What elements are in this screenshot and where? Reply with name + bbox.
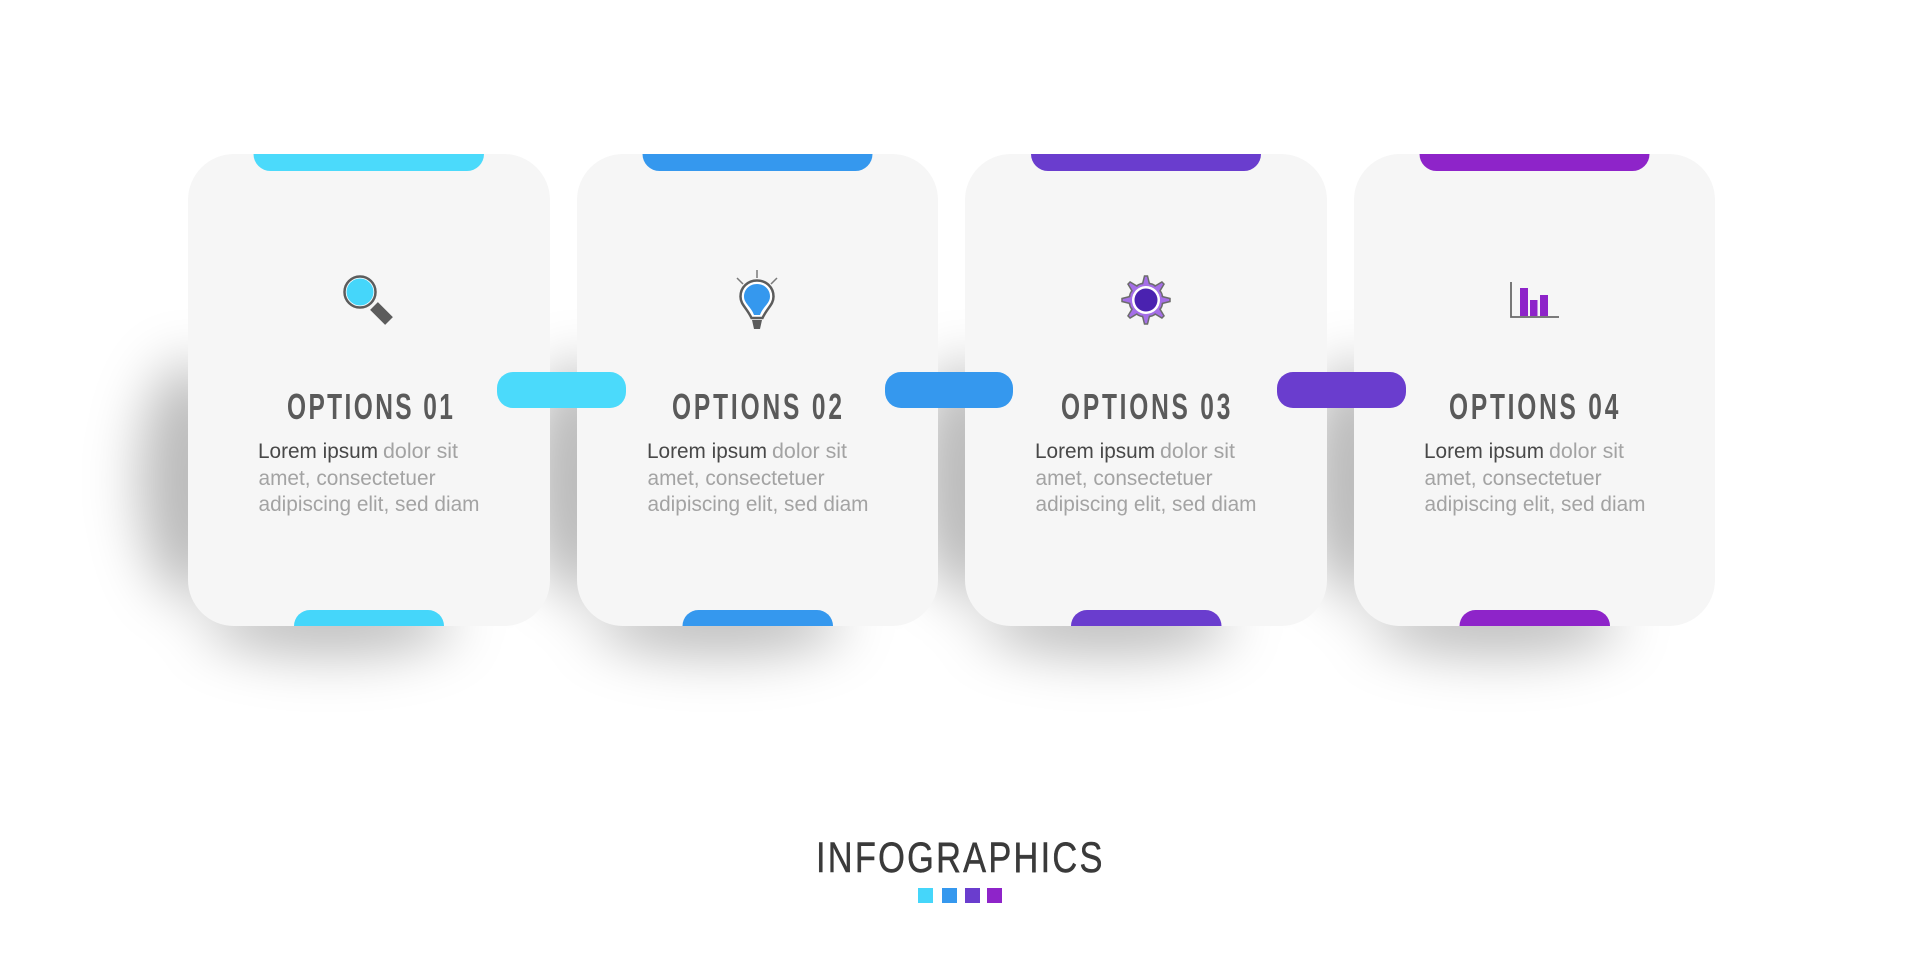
- top tab 04: [1420, 154, 1650, 171]
- colour legend squares: [918, 888, 1002, 903]
- panel: option 01: [188, 154, 550, 626]
- top tab 01: [254, 154, 484, 171]
- top tab 03: [1031, 154, 1261, 171]
- card background 01: [188, 154, 550, 626]
- bottom tab 01: [294, 610, 444, 626]
- text block 04: adipiscing elit, sed diam: [1424, 493, 1646, 516]
- heading: options 01: OPTIONS 01: [287, 386, 453, 427]
- bottom tab 02: [682, 610, 833, 626]
- heading: options 03: OPTIONS 03: [1061, 386, 1230, 427]
- card background 04: [1354, 154, 1715, 626]
- text block 01: dolor sit: [383, 440, 458, 463]
- icon: light bulb: [737, 270, 777, 329]
- text block 01: adipiscing elit, sed diam: [258, 493, 480, 516]
- card shadows: [140, 362, 1621, 654]
- text block 04: amet, consectetuer: [1424, 467, 1602, 490]
- panel: option 04: [1354, 154, 1715, 626]
- text block 01: amet, consectetuer: [258, 467, 436, 490]
- text block 02: [647, 440, 868, 516]
- heading: options 02: OPTIONS 02: [672, 386, 842, 427]
- title: INFOGRAPHICS: [816, 834, 1102, 882]
- panel: option 03: [965, 154, 1327, 626]
- icon: bar chart: [1511, 282, 1559, 317]
- top tab 02: [642, 154, 872, 171]
- card background 02: [577, 154, 938, 626]
- text block 03: adipiscing elit, sed diam: [1036, 493, 1256, 516]
- text block 02: Lorem ipsum: [647, 440, 767, 463]
- heading: options 04: OPTIONS 04: [1449, 386, 1618, 427]
- card background 03: [965, 154, 1327, 626]
- text block 03: [1035, 440, 1256, 516]
- text block 03: dolor sit: [1160, 440, 1235, 463]
- text block 04: [1424, 440, 1646, 516]
- text block 02: amet, consectetuer: [648, 467, 825, 490]
- text block 03: amet, consectetuer: [1036, 467, 1213, 490]
- bottom tab 04: [1460, 610, 1610, 626]
- text block 02: adipiscing elit, sed diam: [648, 493, 868, 516]
- bottom tab 03: [1071, 610, 1222, 626]
- text block 02: dolor sit: [772, 440, 847, 463]
- icon: gear: [1122, 276, 1170, 324]
- text block 01: [258, 440, 480, 516]
- text block 04: dolor sit: [1549, 440, 1624, 463]
- connector 03 to 04: [1277, 372, 1406, 408]
- icon: magnifying glass: [344, 276, 389, 321]
- connector 01 to 02: [497, 372, 626, 408]
- panel: option 02: [577, 154, 938, 626]
- text block 03: Lorem ipsum: [1035, 440, 1155, 463]
- connector 02 to 03: [885, 372, 1013, 408]
- text block 01: Lorem ipsum: [258, 440, 378, 463]
- text block 04: Lorem ipsum: [1424, 440, 1544, 463]
